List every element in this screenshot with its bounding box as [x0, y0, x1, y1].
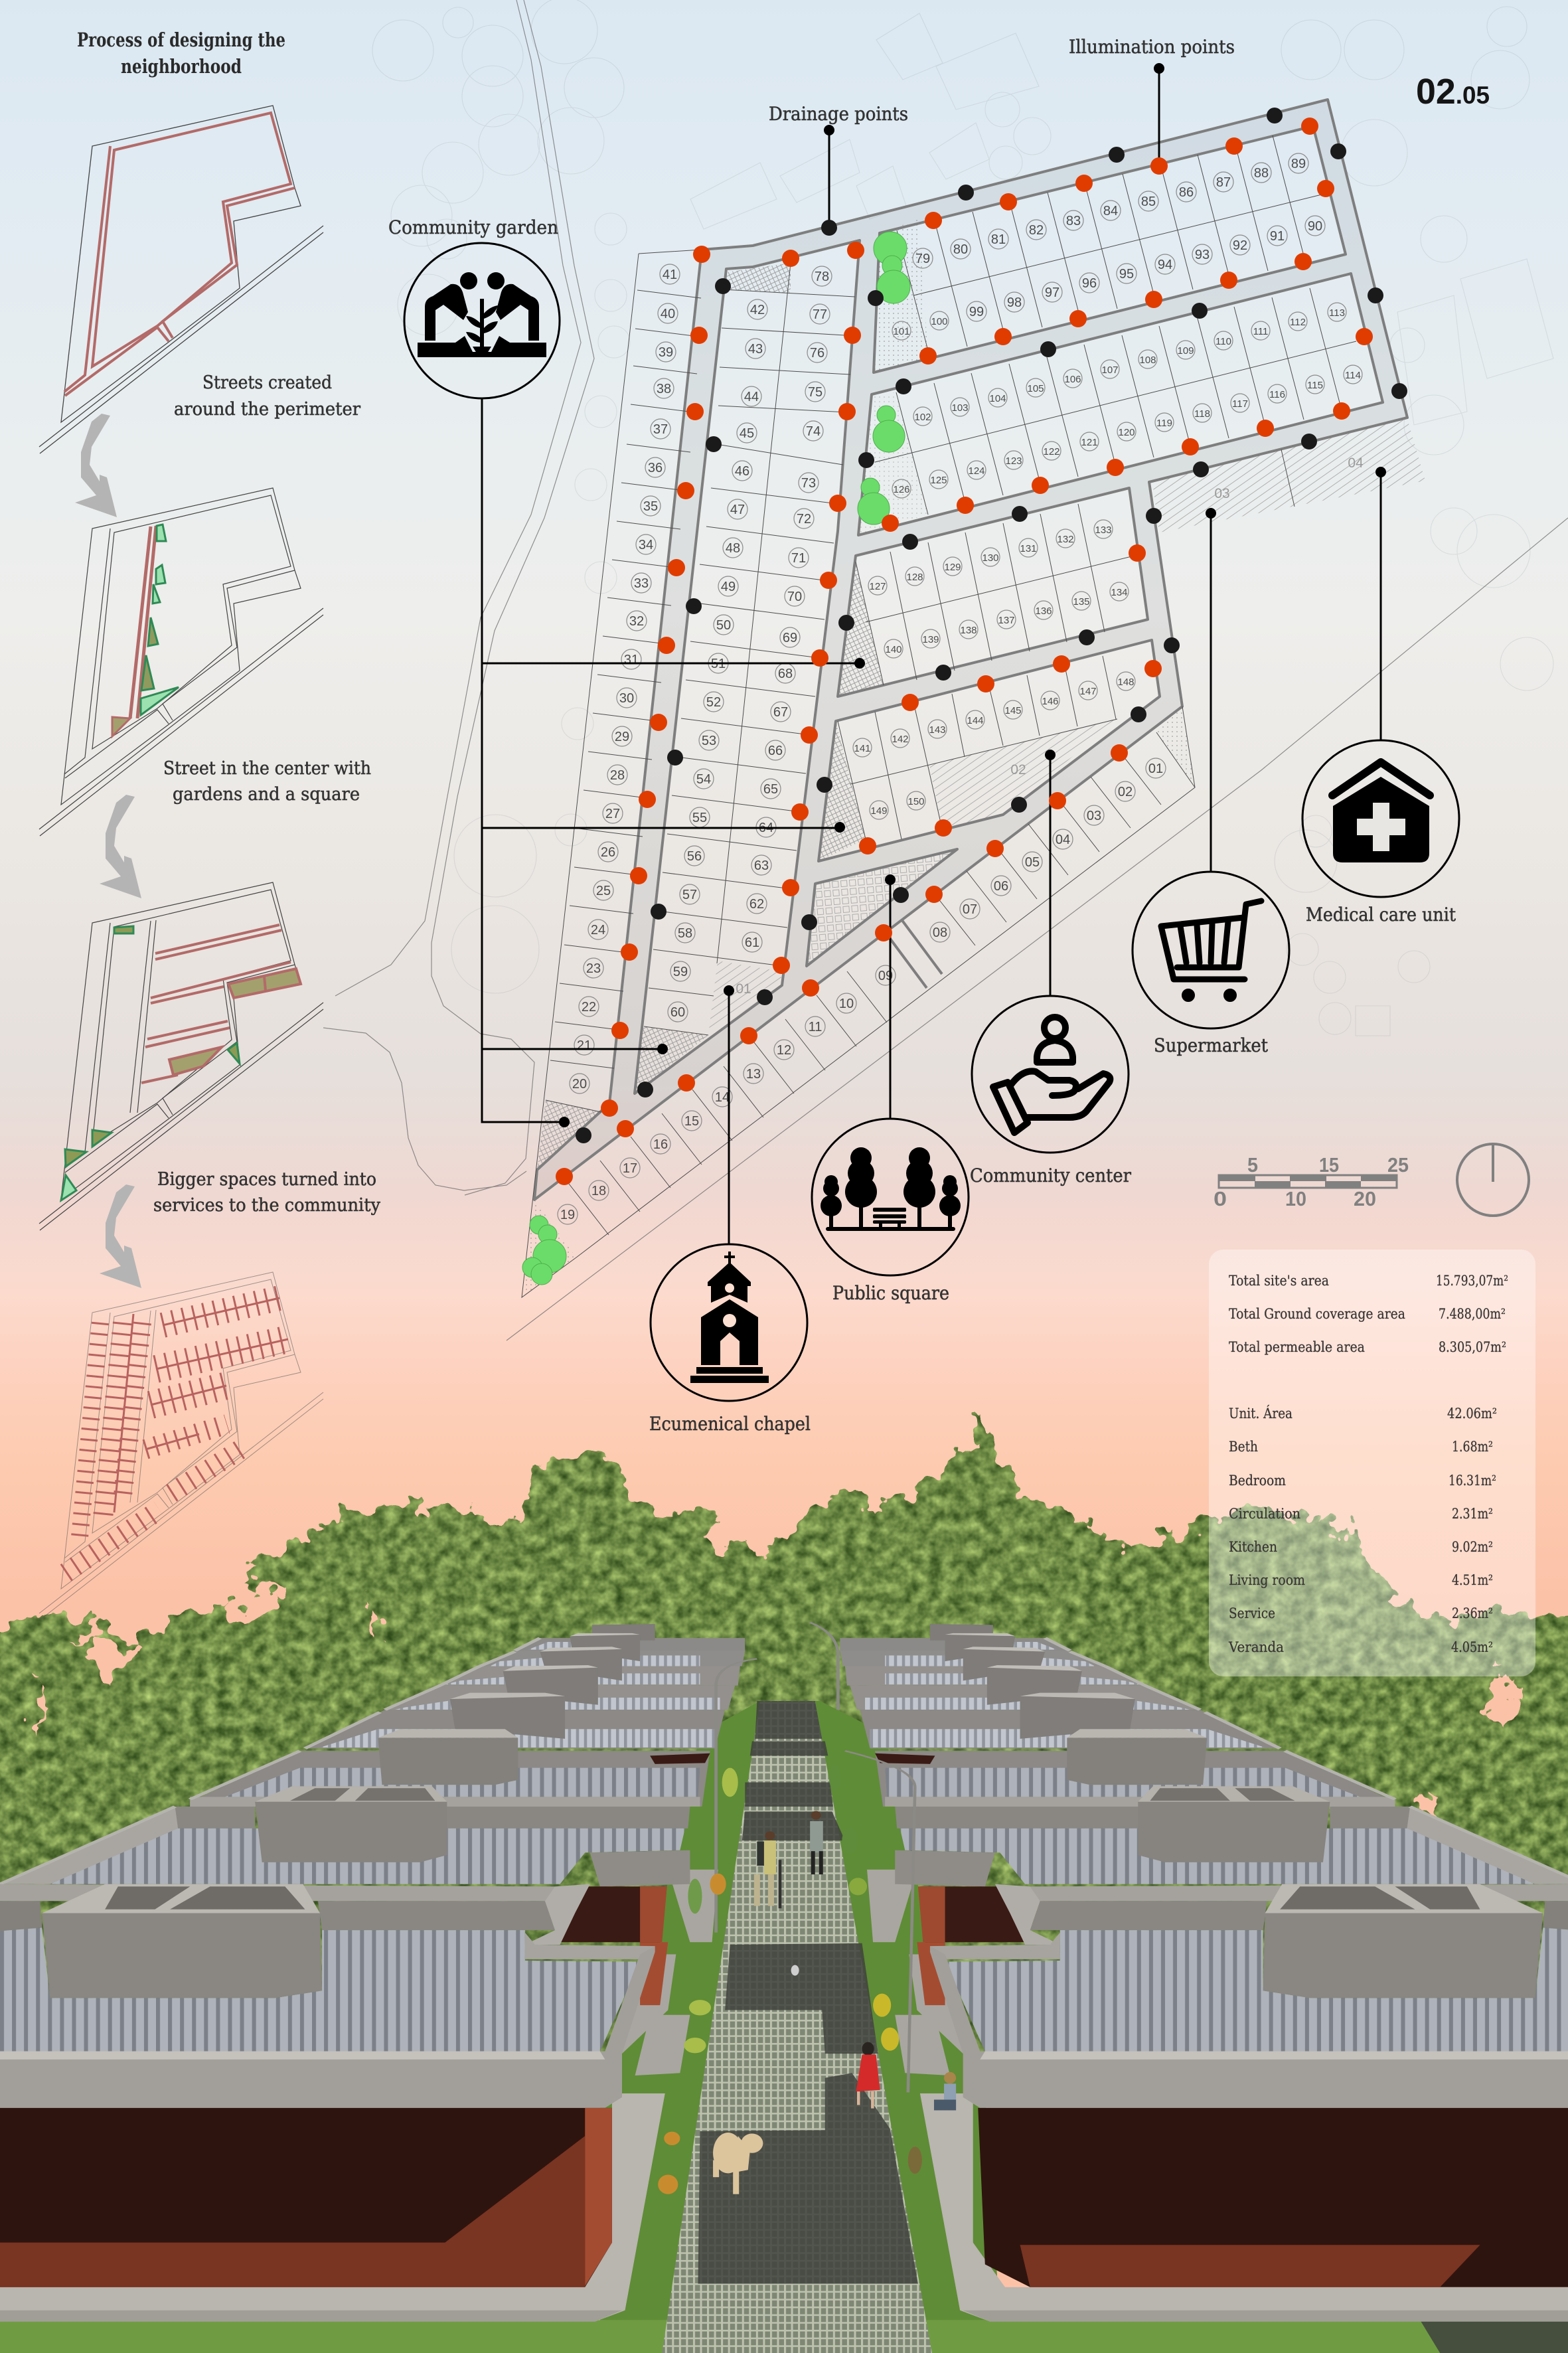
- front fascia: [0, 1946, 655, 2108]
- plan: lot numbers: 37: [653, 422, 668, 437]
- plan: lot numbers: 56: [687, 849, 702, 864]
- icon: hand holding person: [993, 1017, 1110, 1133]
- icon group: ecumenical chapel: [649, 1244, 811, 1435]
- plan: lot numbers: 49: [721, 580, 736, 594]
- plan: lot numbers: 51: [711, 657, 726, 671]
- scale bar: 15: [1319, 1153, 1339, 1176]
- arrow 2: [100, 795, 141, 898]
- plan: lot numbers: 120: [1118, 427, 1135, 438]
- plan: lot numbers: 39: [659, 345, 673, 360]
- plan: lot numbers: 72: [797, 512, 811, 527]
- plan: lot numbers: 98: [1007, 295, 1022, 310]
- plan: lot numbers: 75: [808, 385, 823, 400]
- step 3 caption: [153, 1169, 381, 1216]
- plan: lot numbers: 40: [661, 307, 675, 321]
- plan: lot numbers: 34: [639, 538, 653, 552]
- plan: lot numbers: 48: [726, 541, 740, 556]
- plan: lot numbers: 65: [763, 782, 778, 797]
- plan: lot numbers: 31: [624, 653, 639, 667]
- label: supermarket: Supermarket: [1154, 1034, 1269, 1056]
- scale bar: 5: [1247, 1153, 1258, 1176]
- plan: lot numbers: 78: [815, 270, 829, 284]
- plan: lot numbers: 36: [648, 461, 663, 475]
- walkway shadows: [698, 1701, 1568, 2353]
- icon: shopping cart: [1161, 901, 1261, 999]
- unit area rows: Veranda: [1228, 1639, 1284, 1655]
- scale bar: [1214, 1153, 1409, 1210]
- plan: lot numbers: 124: [968, 465, 985, 477]
- plan: service lot labels: 01: [736, 981, 751, 997]
- left brick wall: [0, 2108, 612, 2287]
- unit area rows: [1228, 1406, 1497, 1655]
- process heading: [77, 29, 285, 78]
- site area rows: 15.793,07m²: [1436, 1273, 1508, 1289]
- plan: lot numbers: 109: [1177, 345, 1194, 357]
- unit area rows: Kitchen: [1229, 1539, 1277, 1555]
- plan: lot numbers: 102: [914, 412, 931, 423]
- plan: lot numbers: 11: [809, 1020, 822, 1034]
- step 3 caption: services to the community: [153, 1195, 381, 1216]
- sidewalk slabs: [622, 1870, 718, 2075]
- plan: lot numbers: 79: [915, 252, 930, 266]
- plan: lot numbers: 28: [610, 768, 625, 783]
- plan: lot numbers: 136: [1035, 606, 1052, 617]
- plan: lot numbers: 71: [791, 551, 806, 566]
- row 5: [385, 1686, 735, 1710]
- person with backpack and bicycle: [754, 1831, 780, 1908]
- site area rows: Total permeable area: [1229, 1339, 1365, 1355]
- side brick strip: [640, 1942, 668, 2005]
- plan: service lot labels: 03: [1214, 486, 1230, 501]
- right brick wall: [978, 2108, 1568, 2287]
- plan: lot numbers: 100: [931, 316, 948, 327]
- plan: lot numbers: 125: [930, 475, 947, 486]
- plan: service lot labels: [736, 455, 1364, 997]
- plan: lot numbers: 93: [1195, 248, 1210, 262]
- row 3: [190, 1751, 710, 1807]
- plan: lot numbers: 29: [615, 730, 629, 744]
- ground and buildings render: [0, 1623, 1568, 2353]
- seated person: [934, 2072, 956, 2110]
- label: public square: Public square: [832, 1282, 949, 1304]
- plan: leader end dots: [559, 63, 1386, 1127]
- plan: illumination points (red): [556, 118, 1373, 1185]
- front roof: [0, 1927, 640, 2051]
- plan: lot numbers: 68: [778, 667, 793, 681]
- plan: lot numbers: 96: [1082, 276, 1097, 291]
- plan: lot numbers: 23: [586, 961, 601, 976]
- plan: lot numbers: [558, 153, 1362, 1224]
- plan: lot numbers: 55: [692, 811, 707, 825]
- plan: lot numbers: 27: [605, 807, 620, 821]
- plan: service lot labels: 04: [1348, 455, 1364, 471]
- sheet number: 02.05: [1416, 72, 1490, 112]
- plan: lot numbers: 09: [878, 969, 893, 983]
- plan: lot numbers: 53: [702, 734, 716, 748]
- plan: lot numbers: 105: [1027, 383, 1044, 394]
- plan: lot numbers: 83: [1066, 214, 1081, 228]
- icon: chapel: [690, 1252, 769, 1383]
- bottom lawn: [0, 2320, 1568, 2353]
- plan: lot numbers: 04: [1056, 833, 1070, 847]
- plan: lot numbers: 141: [854, 743, 871, 754]
- plan: lot numbers: 66: [768, 744, 783, 758]
- plan: lot numbers: 42: [750, 303, 765, 317]
- plan: lot numbers: 12: [777, 1043, 791, 1058]
- site plan: [482, 63, 1425, 1297]
- plan: lot numbers: 70: [787, 590, 802, 604]
- plan: lot numbers: 16: [653, 1137, 668, 1152]
- icon: clinic house with cross: [1332, 762, 1430, 862]
- plan: lot numbers: 110: [1215, 336, 1231, 347]
- plan: lot numbers: 77: [813, 307, 827, 322]
- plan: lot numbers: 01: [1148, 762, 1163, 776]
- plan: lot numbers: 131: [1020, 543, 1037, 554]
- icon group: medical care unit: [1302, 740, 1459, 926]
- cat: [791, 1965, 799, 1976]
- label: ecumenical chapel: Ecumenical chapel: [649, 1413, 811, 1435]
- plan: lot lines: [522, 135, 1356, 1297]
- north symbol: [1457, 1144, 1529, 1216]
- plan: lot numbers: 142: [892, 734, 909, 745]
- unit area rows: Service: [1229, 1605, 1275, 1621]
- front water tank: [42, 1884, 320, 1913]
- plan: lot numbers: 60: [670, 1005, 685, 1020]
- plan: lot numbers: 129: [944, 562, 961, 573]
- plan: lot numbers: 67: [773, 705, 788, 720]
- plan: lot numbers: 92: [1233, 238, 1247, 253]
- dog: [713, 2133, 763, 2194]
- plan: lot numbers: 122: [1043, 446, 1060, 457]
- plan: lot numbers: 85: [1141, 195, 1156, 209]
- unit area rows: 2.36m²: [1452, 1605, 1493, 1621]
- label: illumination points: Illumination points: [1069, 36, 1235, 58]
- plan: lot numbers: 64: [759, 821, 773, 835]
- plan: lot numbers: 15: [684, 1114, 699, 1129]
- plan: lot numbers: 104: [989, 393, 1006, 404]
- plan: lot numbers: 135: [1073, 596, 1090, 608]
- step 4 diagram: housing lots: [39, 1272, 323, 1620]
- plan: lot numbers: 106: [1064, 374, 1081, 385]
- plan: lot numbers: 81: [991, 232, 1006, 247]
- plan: lot numbers: 41: [663, 268, 677, 282]
- step 1 caption: around the perimeter: [174, 399, 360, 420]
- plan: lot numbers: 02: [1118, 785, 1133, 799]
- plan: lot numbers: 145: [1004, 705, 1022, 716]
- plan: lot numbers: 108: [1139, 355, 1156, 366]
- row 7: [480, 1651, 745, 1666]
- plan: lot numbers: 121: [1081, 437, 1098, 448]
- left building block: [0, 1624, 745, 2322]
- plan: lot numbers: 58: [678, 926, 692, 941]
- plan: lot numbers: 134: [1111, 587, 1128, 598]
- plan: lot numbers: 88: [1254, 166, 1269, 181]
- step 1 caption: [174, 372, 360, 420]
- plan: lot numbers: 03: [1087, 809, 1101, 823]
- plan: lot numbers: 123: [1005, 455, 1022, 467]
- unit area rows: 1.68m²: [1452, 1439, 1493, 1455]
- plan: lot numbers: 43: [748, 342, 763, 357]
- plan: lot numbers: 103: [951, 402, 969, 414]
- people and animals: [713, 1811, 956, 2194]
- grass: [0, 1701, 1568, 2353]
- plan: lot numbers: 18: [591, 1184, 606, 1198]
- plan: lot numbers: 147: [1079, 686, 1097, 697]
- step 2 diagram: center street with gardens: [39, 488, 323, 836]
- site area rows: Total Ground coverage area: [1229, 1306, 1405, 1322]
- plan: lot numbers: 128: [906, 572, 923, 583]
- plan: lot numbers: 63: [754, 858, 769, 873]
- plan: lot numbers: 19: [560, 1208, 575, 1222]
- plan: lot numbers: 95: [1119, 267, 1134, 282]
- plan: lot numbers: 86: [1179, 185, 1194, 200]
- unit area rows: 9.02m²: [1452, 1539, 1493, 1555]
- standing person: [810, 1811, 823, 1874]
- plan: lot numbers: 14: [715, 1090, 730, 1105]
- site area rows: 7.488,00m²: [1439, 1306, 1506, 1322]
- plan: lot numbers: 38: [657, 382, 671, 396]
- plan: lot numbers: 24: [591, 923, 605, 937]
- plan: lot numbers: 118: [1194, 408, 1210, 420]
- step 1 diagram: perimeter streets: [39, 106, 323, 453]
- plan: lot numbers: 08: [933, 926, 947, 940]
- icon: gardeners and plant: [418, 272, 546, 357]
- plan: lot numbers: 47: [730, 503, 745, 517]
- plan: lot numbers: 132: [1057, 534, 1074, 545]
- plan: lot numbers: 89: [1291, 157, 1306, 171]
- step 3 caption: Bigger spaces turned into: [157, 1169, 376, 1190]
- plan: lot numbers: 25: [596, 884, 611, 898]
- unit area rows: Unit. Área: [1229, 1406, 1293, 1421]
- plan: lot numbers: 82: [1029, 223, 1044, 238]
- plan: lot numbers: 126: [893, 484, 910, 495]
- plan: lot numbers: 22: [582, 1000, 596, 1014]
- alcove: [560, 1886, 665, 1942]
- site area rows: [1229, 1273, 1508, 1355]
- icon group: community center: [970, 996, 1132, 1186]
- plan: lot numbers: 119: [1156, 418, 1172, 429]
- plan: lot numbers: 17: [623, 1161, 637, 1176]
- plan: lot numbers: 113: [1329, 307, 1345, 319]
- plan: lot numbers: 107: [1101, 365, 1119, 376]
- plan: lot numbers: 84: [1103, 204, 1118, 218]
- plan: service and green area hatches: [522, 219, 1425, 1297]
- unit area rows: Circulation: [1229, 1506, 1300, 1522]
- plan: lot numbers: 149: [870, 805, 888, 817]
- plan: lot numbers: 50: [716, 618, 731, 633]
- plan: lot numbers: 139: [922, 634, 939, 645]
- background foliage: [0, 1414, 1568, 2058]
- site area rows: 8.305,07m²: [1439, 1339, 1506, 1355]
- plan: lot numbers: 21: [577, 1038, 591, 1053]
- unit area rows: 4.05m²: [1451, 1639, 1493, 1655]
- plan: lot numbers: 32: [629, 614, 644, 629]
- plan: lot numbers: 138: [960, 625, 977, 636]
- plan: lot numbers: 62: [749, 897, 764, 912]
- plan: lot numbers: 30: [619, 691, 634, 706]
- site area rows: Total site's area: [1229, 1273, 1329, 1289]
- plan: lot numbers: 05: [1025, 855, 1040, 870]
- icon: trees and bench: [821, 1147, 961, 1231]
- concrete rim along outer roof edge: [0, 1638, 540, 1884]
- scale bar: 25: [1387, 1153, 1409, 1176]
- plan: side street between lots 08 and 09: [890, 920, 942, 988]
- plan: lot numbers: 87: [1216, 175, 1231, 190]
- right building block: [840, 1624, 1568, 2322]
- unit area rows: Bedroom: [1229, 1473, 1286, 1489]
- plan: lot numbers: 144: [967, 715, 984, 726]
- plan: road network: [534, 100, 1407, 1200]
- plan: lot numbers: 114: [1345, 370, 1361, 381]
- unit area rows: Living room: [1229, 1572, 1305, 1588]
- scale bar: 10: [1285, 1187, 1306, 1210]
- woman in red dress: [856, 2042, 880, 2109]
- plan: lot numbers: 101: [893, 326, 910, 337]
- plan: lot numbers: 46: [735, 464, 749, 479]
- plan: lot numbers: 06: [994, 879, 1008, 894]
- row 1 walls: [0, 1884, 555, 1901]
- plan: lot numbers: 115: [1307, 380, 1323, 391]
- plan: lot numbers: 94: [1158, 258, 1172, 272]
- icon group: community garden: [388, 216, 560, 398]
- plan: lot numbers: 57: [682, 888, 697, 902]
- icon group: public square: [812, 1119, 969, 1304]
- plan: lot numbers: 54: [696, 772, 711, 787]
- plan: lot numbers: 35: [643, 499, 658, 514]
- plan: lot numbers: 26: [601, 845, 615, 860]
- label: community garden: Community garden: [388, 216, 558, 238]
- surrounding access road lines: [323, 0, 1568, 1340]
- row 4: [305, 1710, 725, 1748]
- plan: lot numbers: 44: [744, 390, 759, 404]
- icon group: supermarket: [1133, 872, 1289, 1056]
- plan: lot numbers: 127: [869, 581, 886, 592]
- plan: lot numbers: 20: [572, 1077, 587, 1092]
- plan: lot numbers: 143: [929, 724, 946, 736]
- plan: lot numbers: 74: [806, 424, 821, 439]
- plan: lot numbers: 146: [1042, 696, 1059, 707]
- scale bar: 20: [1354, 1187, 1376, 1210]
- label: medical care unit: Medical care unit: [1306, 904, 1456, 926]
- process heading: neighborhood: [121, 55, 242, 78]
- unit area rows: 42.06m²: [1447, 1406, 1497, 1421]
- plan: lot numbers: 52: [706, 695, 721, 710]
- plan: lot numbers: 133: [1095, 525, 1112, 536]
- step 3 diagram: services: [39, 882, 323, 1230]
- plan: lot numbers: 59: [673, 965, 688, 979]
- plan: lot numbers: 13: [746, 1067, 761, 1082]
- scale bar: 0: [1214, 1187, 1227, 1210]
- row 2: [175, 1807, 255, 1828]
- plan: tree canopies: [522, 232, 910, 1285]
- plan: lot numbers: 33: [634, 576, 649, 591]
- step 2 caption: Street in the center with: [163, 758, 371, 779]
- plan: lot numbers: 150: [907, 796, 925, 807]
- plan: lot numbers: 10: [839, 997, 854, 1011]
- label: drainage points: Drainage points: [769, 103, 908, 125]
- arrow 1: [75, 414, 117, 517]
- plan: lot numbers: 97: [1045, 285, 1059, 300]
- plan: leader lines: [482, 68, 1381, 1244]
- plan: lot numbers: 140: [885, 644, 902, 655]
- unit area rows: 16.31m²: [1449, 1473, 1496, 1489]
- plan: lot numbers: 69: [783, 631, 797, 645]
- plan: lot numbers: 73: [801, 476, 816, 491]
- plan: lot numbers: 91: [1270, 229, 1285, 244]
- plan: lot numbers: 111: [1253, 326, 1268, 337]
- plan: lot numbers: 61: [745, 935, 759, 950]
- unit area rows: 4.51m²: [1452, 1572, 1493, 1588]
- label: community center: Community center: [970, 1165, 1132, 1186]
- plan: drainage points (black): [576, 108, 1407, 1143]
- plan: lot numbers: 80: [953, 242, 968, 257]
- step 2 caption: gardens and a square: [173, 784, 360, 805]
- plan: lot numbers: 116: [1269, 389, 1285, 400]
- plan: lot numbers: 07: [963, 902, 977, 917]
- paved walkway: [662, 1701, 932, 2353]
- plan: lot numbers: 99: [969, 305, 984, 319]
- plan: service lot labels: 02: [1010, 762, 1026, 777]
- plan: lot numbers: 117: [1232, 398, 1248, 410]
- faint neighbouring context: trees and houses: [372, 0, 1553, 1036]
- step 1 caption: Streets created: [202, 372, 332, 393]
- row 8: [515, 1638, 745, 1652]
- process panel: [39, 29, 381, 1620]
- data table panel: [1209, 1250, 1535, 1676]
- lamp posts: [716, 1623, 915, 2092]
- unit area rows: Beth: [1229, 1439, 1258, 1455]
- plan: lot numbers: 148: [1117, 677, 1135, 688]
- plan: lot numbers: 130: [982, 552, 999, 564]
- plan: lot numbers: 76: [810, 346, 824, 361]
- step 2 caption: [163, 758, 371, 805]
- plan: lot numbers: 90: [1308, 219, 1322, 234]
- arrow 3: [100, 1184, 141, 1288]
- plan: lot numbers: 137: [998, 615, 1015, 626]
- unit area rows: 2.31m²: [1452, 1506, 1493, 1522]
- row 6: [440, 1666, 740, 1686]
- process heading: Process of designing the: [77, 29, 285, 51]
- plan: lot numbers: 45: [740, 426, 754, 441]
- plants: [658, 1765, 922, 2194]
- plan: lot numbers: 112: [1290, 317, 1306, 328]
